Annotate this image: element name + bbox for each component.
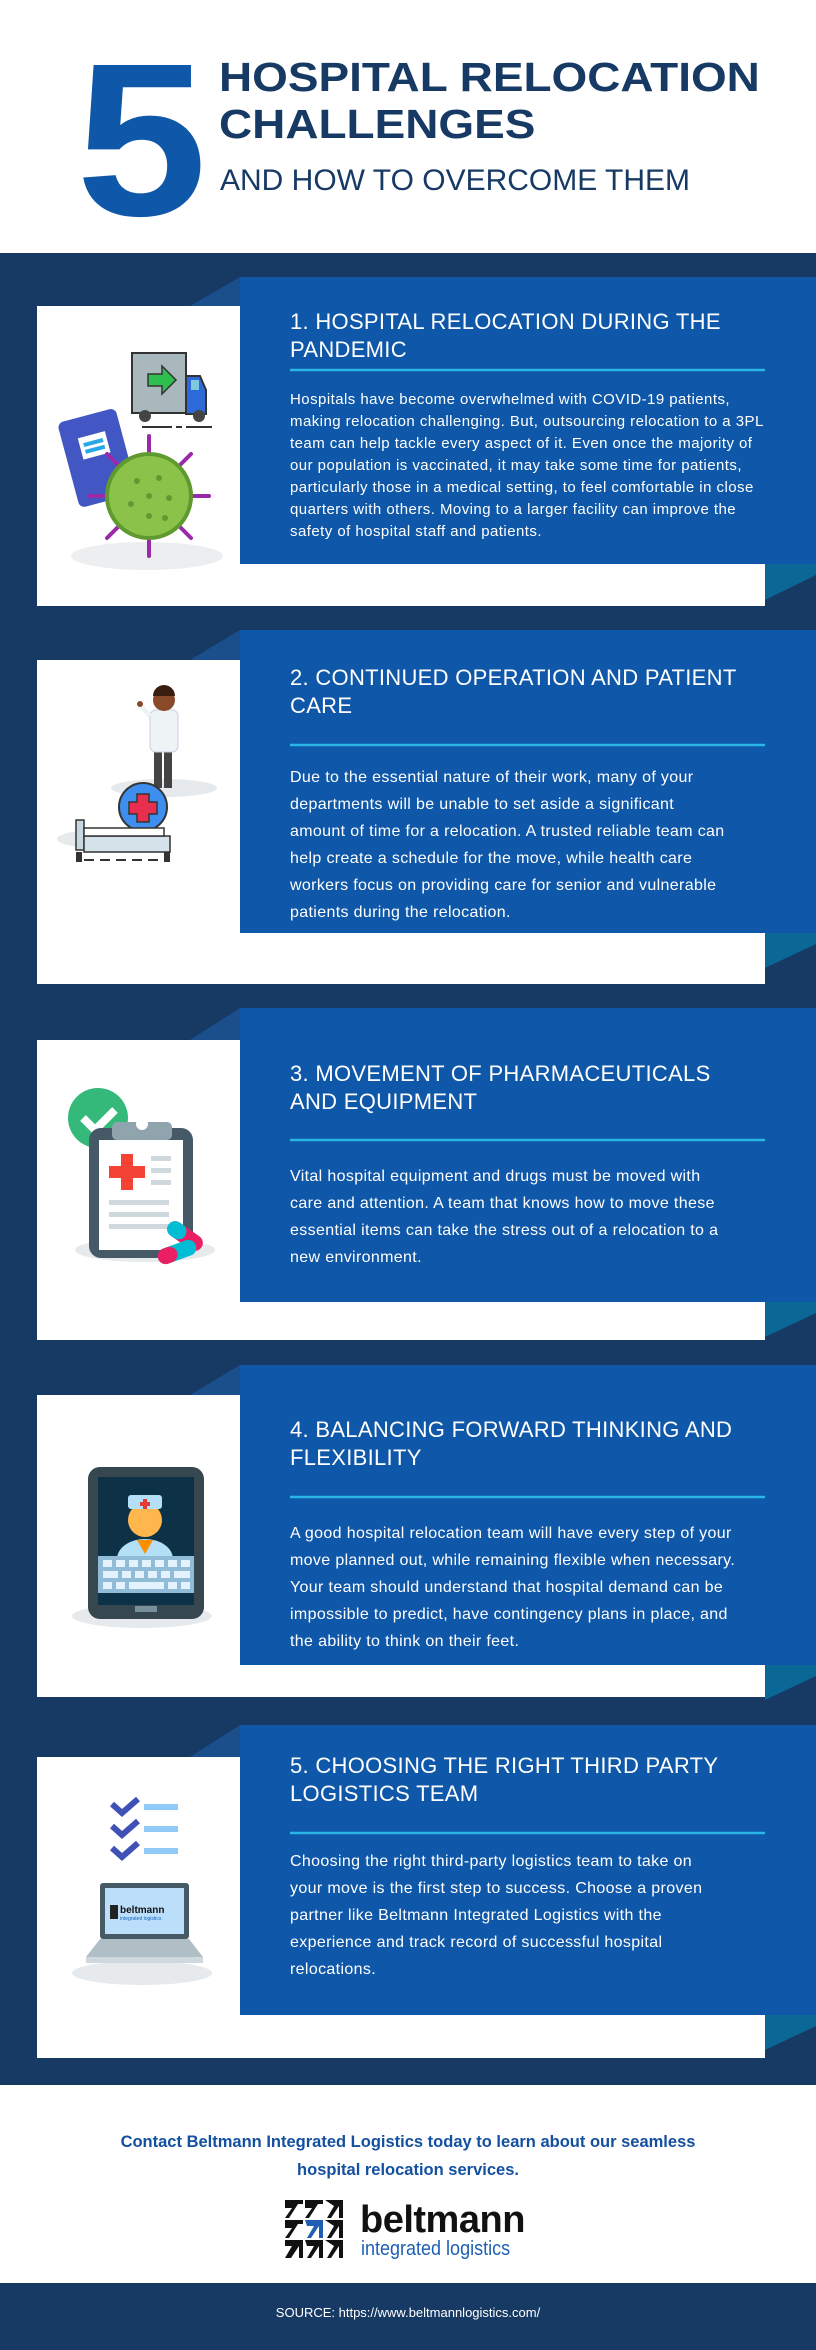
heading 3: AND EQUIPMENT (290, 1089, 477, 1114)
subtitle: AND HOW TO OVERCOME THEM (220, 164, 690, 197)
call to action: hospital relocation services. (297, 2161, 519, 2179)
body 4: impossible to predict, have contingency plans in place, and (290, 1606, 728, 1623)
logo (285, 2199, 525, 2260)
body 5: your move is the first step to success. Choose a proven (290, 1880, 702, 1897)
icon: clipboard, check and pills (68, 1088, 215, 1264)
heading 2: 2. CONTINUED OPERATION AND PATIENT (290, 665, 737, 690)
icon: checklist and laptop: integrated logistics (120, 1916, 162, 1922)
body 2 (290, 769, 725, 921)
body 2: workers focus on providing care for senior and vulnerable (290, 877, 716, 894)
icon: logo mark (285, 2200, 343, 2258)
icon: checklist and laptop (72, 1796, 212, 1985)
heading 3: 3. MOVEMENT OF PHARMACEUTICALS (290, 1061, 711, 1086)
body 1: Hospitals have become overwhelmed with COVID-19 patients, (290, 391, 730, 408)
body 5 (290, 1853, 702, 1978)
body 3: Vital hospital equipment and drugs must be moved with (290, 1168, 700, 1185)
body 3: care and attention. A team that knows how to move these (290, 1195, 715, 1212)
body 3 (290, 1168, 718, 1266)
body 4: the ability to think on their feet. (290, 1633, 519, 1650)
body 1 (290, 391, 764, 540)
title (219, 54, 760, 147)
body 1: quarters with others. Moving to a larger facility can improve the (290, 501, 736, 518)
body 2: departments will be unable to set aside a significant (290, 796, 674, 813)
body 4 (290, 1525, 735, 1650)
body 2: Due to the essential nature of their work, many of your (290, 769, 693, 786)
logo text: beltmann (360, 2199, 525, 2241)
heading 1: PANDEMIC (290, 337, 407, 362)
heading 4: FLEXIBILITY (290, 1445, 422, 1470)
body 1: team can help tackle every aspect of it. Even once the majority of (290, 435, 752, 452)
body 4: A good hospital relocation team will have every step of your (290, 1525, 732, 1542)
heading 2: CARE (290, 693, 352, 718)
body 5: relocations. (290, 1961, 376, 1978)
body 1: making relocation challenging. But, outsourcing relocation to a 3PL (290, 413, 764, 430)
call to action (121, 2133, 695, 2179)
title: HOSPITAL RELOCATION (219, 54, 760, 100)
body 2: help create a schedule for the move, while health care (290, 850, 692, 867)
body 4: move planned out, while remaining flexible when necessary. (290, 1552, 735, 1569)
heading 4: 4. BALANCING FORWARD THINKING AND (290, 1417, 732, 1442)
body 1: our population is vaccinated, it may take some time for patients, (290, 457, 742, 474)
heading 4 (290, 1417, 732, 1470)
body 5: experience and track record of successful hospital (290, 1934, 662, 1951)
icon: checklist and laptop: beltmann (120, 1905, 164, 1916)
logo: integrated logistics (361, 2238, 510, 2260)
body 5: partner like Beltmann Integrated Logistics with the (290, 1907, 662, 1924)
call to action: Contact Beltmann Integrated Logistics today to learn about our seamless (121, 2133, 695, 2151)
heading 2 (290, 665, 737, 718)
heading 1: 1. HOSPITAL RELOCATION DURING THE (290, 309, 721, 334)
icon: tablet with doctor (72, 1467, 212, 1628)
heading 5 (290, 1753, 718, 1806)
body 5: Choosing the right third-party logistics team to take on (290, 1853, 692, 1870)
body 2: patients during the relocation. (290, 904, 511, 921)
heading 3 (290, 1061, 711, 1114)
heading 5: LOGISTICS TEAM (290, 1781, 478, 1806)
big number 5: 5 (76, 19, 207, 262)
icon: doctor and hospital bed (57, 685, 217, 862)
body 3: new environment. (290, 1249, 422, 1266)
body 4: Your team should understand that hospital demand can be (290, 1579, 723, 1596)
body 1: safety of hospital staff and patients. (290, 523, 542, 540)
body 3: essential items can take the stress out of a relocation to a (290, 1222, 718, 1239)
body 1: particularly those in a medical setting, to feel comfortable in close (290, 479, 754, 496)
heading 1 (290, 309, 721, 362)
body 2: amount of time for a relocation. A trusted reliable team can (290, 823, 725, 840)
heading 5: 5. CHOOSING THE RIGHT THIRD PARTY (290, 1753, 718, 1778)
icon: truck, notebook and virus (58, 352, 223, 570)
source: SOURCE: https://www.beltmannlogistics.com/ (276, 2305, 540, 2320)
title: CHALLENGES (219, 101, 535, 147)
